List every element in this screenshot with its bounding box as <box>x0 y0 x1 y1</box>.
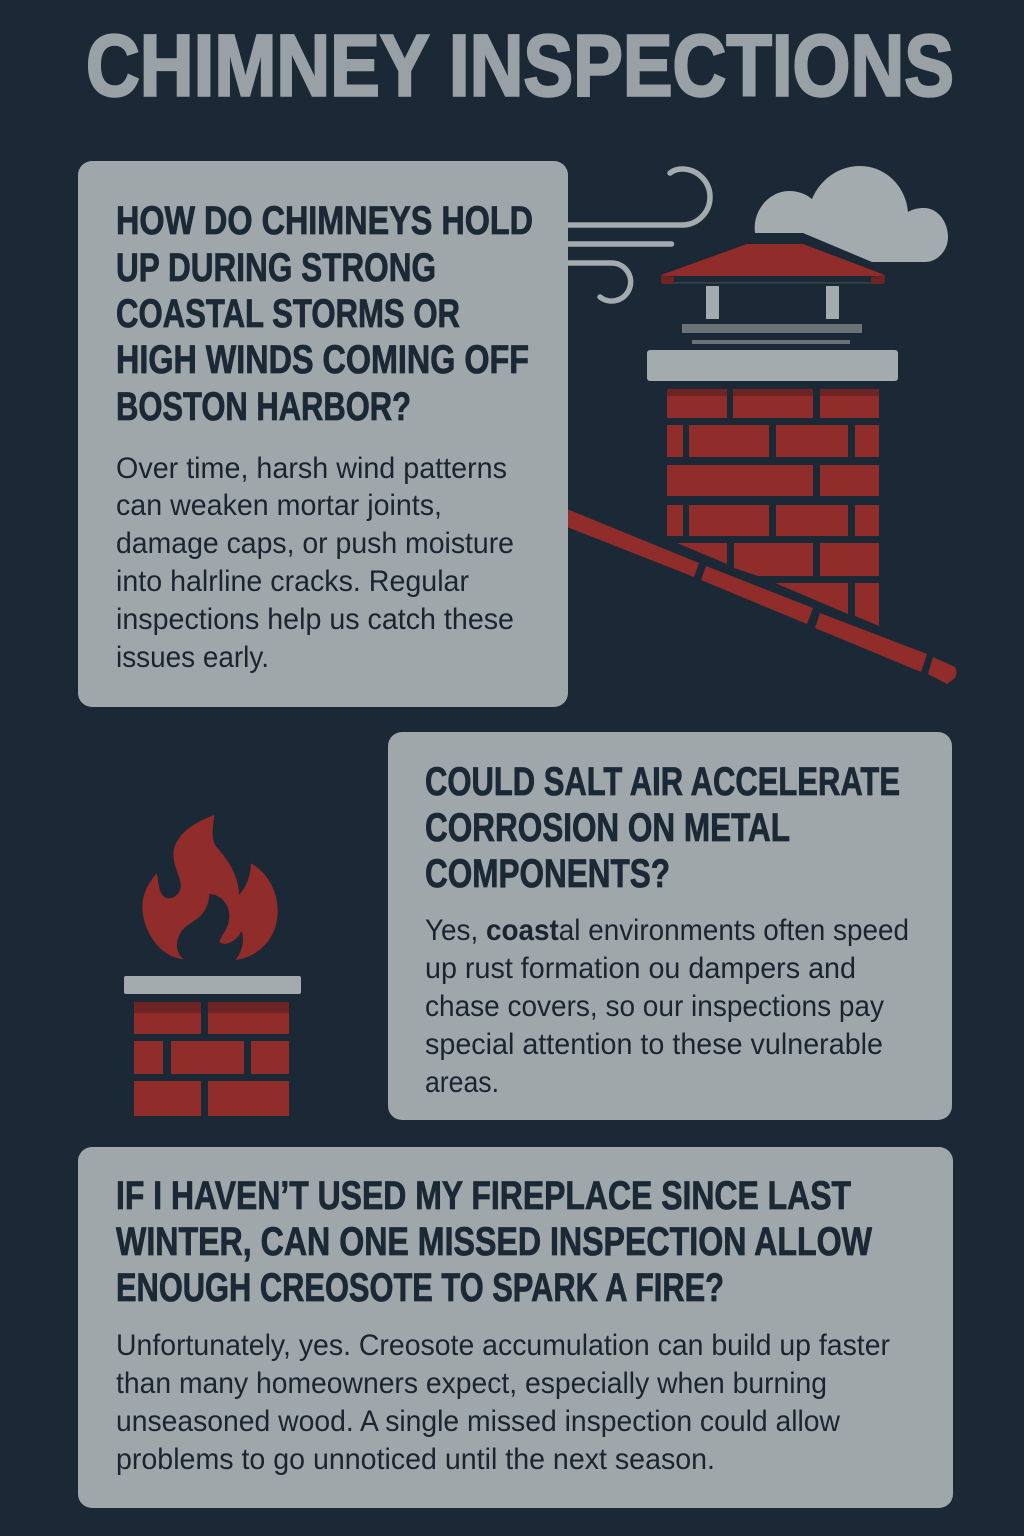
body text: storms answer: issues early. <box>116 641 269 674</box>
heading: storms question <box>116 199 533 429</box>
heading: creosote question: ENOUGH CREOSOTE TO SPARK A FIRE? <box>116 1266 724 1310</box>
cap posts <box>706 286 839 319</box>
panel: storms and high winds <box>78 161 568 707</box>
heading: storms question: UP DURING STRONG <box>116 246 436 290</box>
icon: wind lines <box>565 169 710 301</box>
small brick stack <box>134 1002 289 1116</box>
heading: storms question: COASTAL STORMS OR <box>116 292 460 336</box>
body text: storms answer: Over time, harsh wind patterns <box>116 452 507 485</box>
icon: flame <box>142 815 278 960</box>
heading: salt air question: COMPONENTS? <box>425 852 670 896</box>
body text: creosote answer: Unfortunately, yes. Creosote accumulation can build up faster <box>116 1329 890 1362</box>
body text: creosote answer: unseasoned wood. A single missed inspection could allow <box>116 1405 840 1438</box>
roof line <box>567 509 956 684</box>
body text: salt air answer: special attention to these vulnerable <box>425 1028 883 1061</box>
heading: salt air question: COULD SALT AIR ACCELERATE <box>425 760 900 804</box>
heading: storms question: BOSTON HARBOR? <box>116 385 411 429</box>
illustration: chimney on roof <box>567 244 956 684</box>
body text: creosote answer: than many homeowners expect, especially when burning <box>116 1367 827 1400</box>
panel: salt air corrosion <box>388 732 952 1120</box>
body text: storms answer: can weaken mortar joints, <box>116 489 442 522</box>
heading: creosote question: IF I HAVEN’T USED MY FIREPLACE SINCE LAST <box>116 1174 851 1218</box>
body text: creosote answer: problems to go unnoticed until the next season. <box>116 1443 715 1476</box>
body text: creosote answer <box>116 1329 890 1476</box>
body text: storms answer <box>116 452 514 674</box>
heading: salt air question: CORROSION ON METAL <box>425 806 790 850</box>
heading: storms question: HIGH WINDS COMING OFF <box>116 338 529 382</box>
body text: storms answer: inspections help us catch these <box>116 603 514 636</box>
heading: storms question: HOW DO CHIMNEYS HOLD <box>116 199 533 243</box>
icon: small brick chimney <box>124 976 301 1116</box>
body text: salt air answer: up rust formation ou dampers and <box>425 952 856 985</box>
icon: cloud <box>755 166 948 262</box>
heading: creosote question <box>116 1174 872 1310</box>
chimney cap roof <box>661 244 885 284</box>
small chimney crown <box>124 976 301 994</box>
body text: salt air answer: Yes, coastal environments often speed <box>425 914 909 947</box>
cap plates <box>682 324 862 344</box>
body text: salt air answer <box>425 914 909 1099</box>
body text: salt air answer: chase covers, so our inspections pay <box>425 990 884 1023</box>
panel: creosote and missed inspection <box>78 1147 953 1508</box>
body text: salt air answer: areas. <box>425 1066 499 1099</box>
brick stack <box>667 389 879 626</box>
heading: salt air question <box>425 760 900 896</box>
body text: storms answer: into halrline cracks. Regular <box>116 565 469 598</box>
body text: storms answer: damage caps, or push moisture <box>116 527 514 560</box>
chimney crown <box>647 350 898 381</box>
